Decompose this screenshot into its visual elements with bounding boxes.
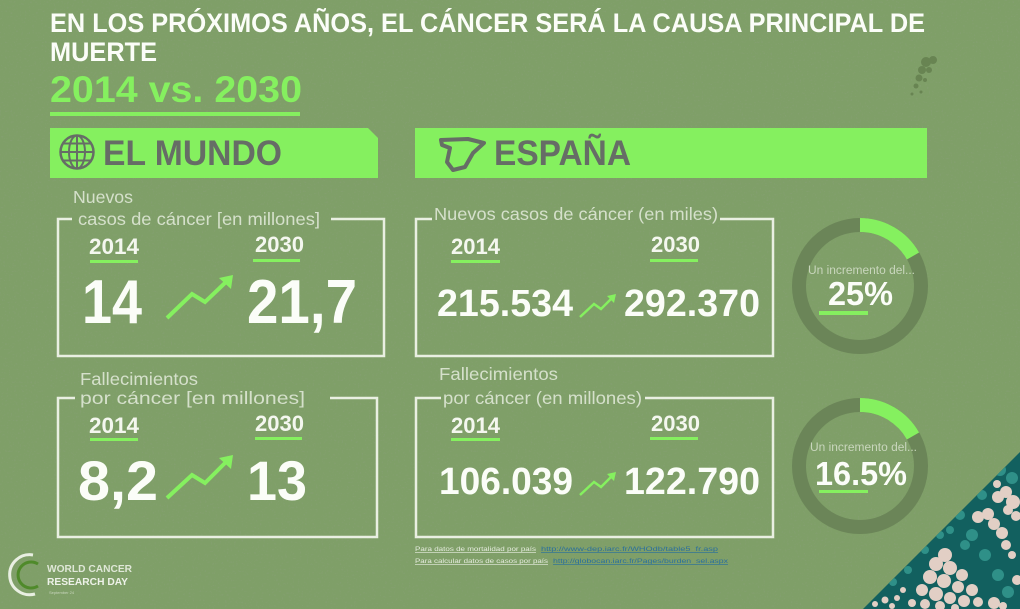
label: new cases: Nuevos	[73, 187, 133, 207]
donut chart: 25% increase	[799, 225, 921, 347]
panel header: España	[415, 128, 927, 178]
source notes: http://www-dep.iarc.fr/WHOdb/table5_fr.asp	[541, 546, 719, 553]
panel header: España: ESPAÑA	[494, 134, 631, 173]
donut chart: 25% increase: Un incremento del...	[808, 265, 915, 277]
label: new cases	[73, 187, 320, 229]
source notes: Para datos de mortalidad por país	[415, 546, 537, 553]
arrow: rising trend	[580, 294, 616, 317]
label: deaths: Fallecimientos	[439, 364, 558, 384]
source notes: Para calcular datos de casos por país	[415, 558, 549, 565]
donut chart: 16.5% increase: Un incremento del...	[810, 442, 917, 454]
label: deaths	[80, 369, 305, 408]
value 21,7: 21,7	[247, 268, 357, 337]
panel: world new cases	[58, 187, 384, 356]
year 2030: 2030	[651, 232, 700, 257]
year 2014: 2014	[451, 234, 501, 259]
dark texture blotch	[910, 56, 937, 96]
panel: Spain new cases	[416, 204, 773, 356]
label: deaths: Fallecimientos	[80, 369, 198, 389]
value 14: 14	[82, 268, 142, 337]
label: deaths	[439, 364, 642, 408]
value 8,2: 8,2	[78, 449, 158, 512]
corner micrograph image	[860, 450, 1020, 609]
year 2030: 2030	[255, 232, 304, 257]
donut chart: 16.5% increase: 16.5%	[815, 455, 907, 492]
logo: World Cancer Research Day: September 24	[49, 590, 75, 595]
value 215.534: 215.534	[437, 283, 573, 325]
arrow: rising trend	[580, 472, 616, 495]
label: deaths: por cáncer (en millones)	[443, 388, 642, 408]
year 2014: 2014	[89, 234, 140, 259]
label: new cases: Nuevos casos de cáncer (en miles)	[434, 204, 718, 224]
value 292.370: 292.370	[624, 283, 760, 325]
logo: World Cancer Research Day: WORLD CANCER	[47, 563, 132, 575]
source notes: http://globocan.iarc.fr/Pages/burden_sel.aspx	[553, 558, 729, 565]
value 13: 13	[247, 449, 307, 512]
year 2030: 2030	[651, 411, 700, 436]
title	[50, 8, 925, 67]
value 106.039: 106.039	[439, 461, 573, 503]
panel: Spain deaths	[416, 364, 773, 537]
arrow: rising trend	[167, 275, 233, 318]
panel header: El Mundo: EL MUNDO	[103, 134, 282, 173]
subtitle: 2014 vs. 2030: 2014 vs. 2030	[50, 69, 302, 110]
year 2014: 2014	[89, 413, 140, 438]
panel header: El Mundo	[50, 128, 378, 178]
logo: World Cancer Research Day	[10, 555, 132, 595]
icon: globe	[60, 136, 94, 168]
source notes	[415, 546, 729, 565]
label: new cases: casos de cáncer [en millones]	[78, 209, 320, 229]
title: MUERTE	[50, 37, 157, 67]
donut chart: 25% increase: 25%	[828, 275, 893, 312]
value 122.790: 122.790	[624, 461, 760, 503]
panel: world deaths	[58, 369, 377, 537]
year 2030: 2030	[255, 411, 304, 436]
title: EN LOS PRÓXIMOS AÑOS, EL CÁNCER SERÁ LA CAUSA PRINCIPAL DE	[50, 8, 925, 38]
label: deaths: por cáncer [en millones]	[80, 388, 305, 408]
icon: map of Spain	[441, 139, 484, 170]
donut chart: 16.5% increase	[799, 405, 921, 527]
year 2014: 2014	[451, 413, 501, 438]
logo: World Cancer Research Day: RESEARCH DAY	[47, 576, 128, 588]
arrow: rising trend	[167, 455, 233, 498]
